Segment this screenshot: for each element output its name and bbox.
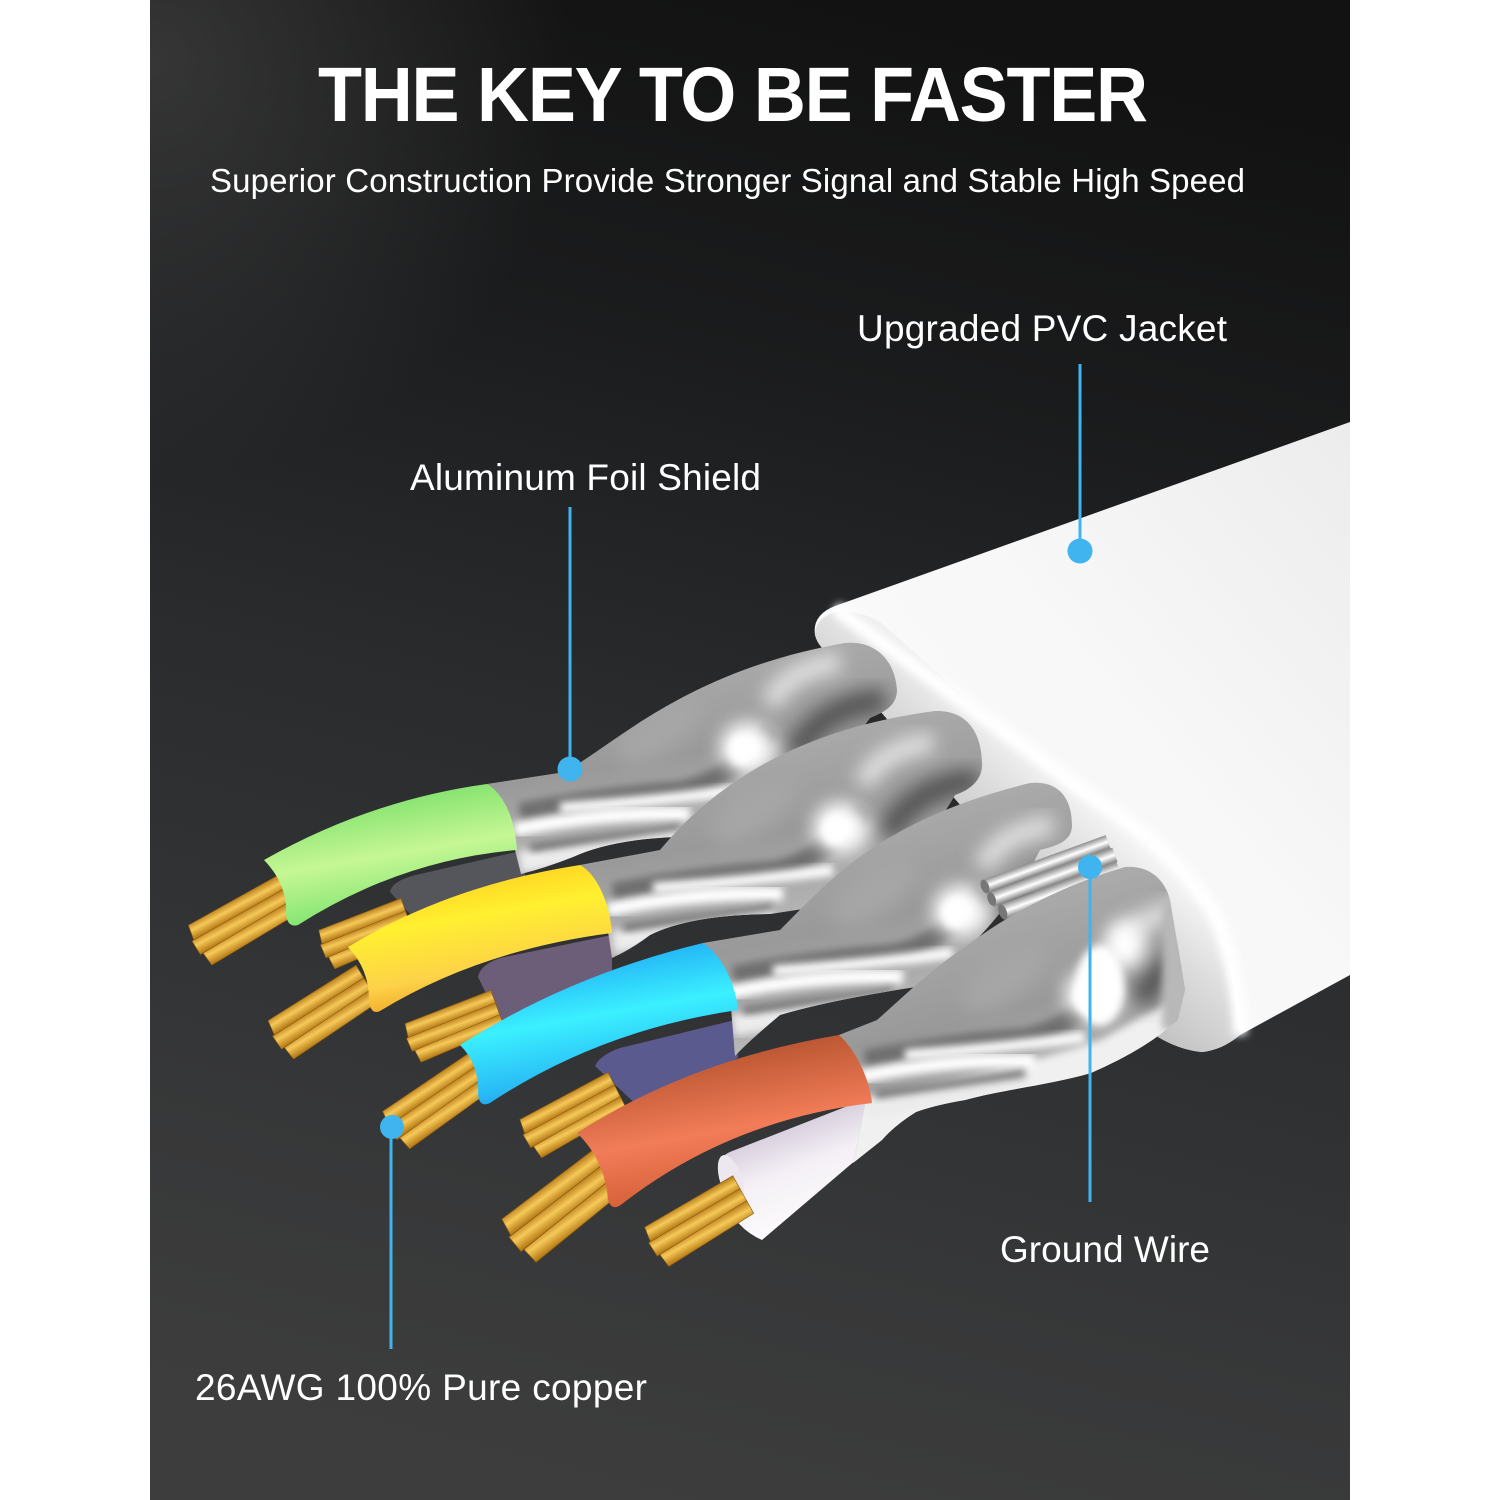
callout: Ground Wire	[1000, 855, 1210, 1270]
wire 3: blue insulated conductor	[378, 943, 738, 1153]
callout: Upgraded PVC Jacket: Upgraded PVC Jacket	[857, 308, 1228, 349]
wire 2: aluminum foil shield	[580, 711, 982, 958]
wire 1: aluminum foil shield	[487, 642, 897, 874]
callout: Aluminum Foil Shield	[410, 457, 761, 782]
wire 2: purple inner conductor	[401, 935, 612, 1064]
wire 1: green insulated conductor	[184, 784, 517, 968]
wire 3: violet inner conductor	[515, 1020, 738, 1161]
callout: 26AWG 100% Pure copper	[195, 1115, 647, 1408]
callout: Ground Wire: Ground Wire	[1000, 1229, 1210, 1270]
wire 1: grey inner conductor	[315, 850, 525, 971]
title: THE KEY TO BE FASTER	[318, 51, 1148, 138]
wire 4: aluminum foil shield	[839, 866, 1185, 1163]
cable illustration	[184, 422, 1350, 1269]
white PVC jacket	[815, 422, 1350, 1052]
callout: Aluminum Foil Shield: Aluminum Foil Shield	[410, 457, 761, 498]
subtitle: Superior Construction Provide Stronger Signal and Stable High Speed	[210, 162, 1245, 199]
callout: Upgraded PVC Jacket	[857, 308, 1228, 564]
wire 3: aluminum foil shield	[703, 782, 1072, 1056]
callout: 26AWG 100% Pure copper: 26AWG 100% Pure copper	[195, 1367, 647, 1408]
wire 4: orange insulated conductor	[497, 1035, 872, 1266]
wire 2: yellow insulated conductor	[263, 865, 612, 1062]
dark background panel	[150, 0, 1350, 1500]
wire 4: white inner conductor	[640, 1098, 868, 1269]
ground wire strands	[979, 834, 1123, 924]
